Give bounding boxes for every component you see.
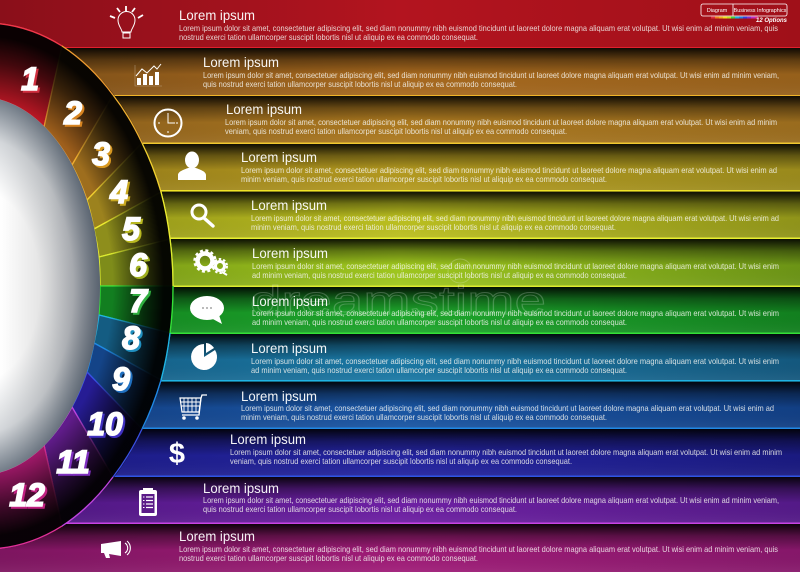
text block: row 3: veniam, quis nostrud exerci tation ullamcorper suscipit lobortis nisl ut aliquip ex ea commodo consequat. [225,126,567,136]
heading: row 8: Lorem ipsum [251,341,327,356]
segment 1 [0,23,62,127]
segment 11 [44,407,113,526]
text block: row 9: minim veniam, quis nostrud exerci tation ullamcorper suscipit lobortis nisl ut aliquip ex ea commodo consequat. [241,412,607,422]
panel: row 4 [0,144,800,192]
panel: row 6 [0,239,800,287]
heading: row 7: Lorem ipsum [252,294,328,309]
segment 7 [99,286,173,333]
text block: row 11: quis nostrud exerci tation ullamcorper suscipit lobortis nisl ut aliquip ex ea commodo consequat. [203,504,517,514]
text block: row 7 [252,308,779,327]
badge: 12 options: Diagram [707,8,728,14]
number 2: 2 [63,95,82,131]
icon: megaphone [101,541,130,558]
badge: 12 options: Business Infographics [734,8,787,14]
number 12: 12 [9,477,45,513]
panel: row 10 [0,429,800,477]
number 7: 7 [129,283,149,319]
watermark: dreamstime [250,279,546,323]
text block: row 4: minim veniam, quis nostrud exerci tation ullamcorper suscipit lobortis nisl ut aliquip ex ea commodo consequat. [241,174,607,184]
circular ring of segments [0,23,173,549]
segment 6 [99,239,173,286]
number 4: 4 [109,174,128,210]
heading: row 9: Lorem ipsum [241,389,317,404]
segment 2 [44,46,113,165]
text block: row 1: nostrud exerci tation ullamcorper suscipit lobortis nisl ut aliquip ex ea commodo consequat. [179,32,478,42]
text block: row 2 [203,70,779,89]
heading: row 11: Lorem ipsum [203,481,279,496]
heading: row 12: Lorem ipsum [179,529,255,544]
ring shadow [0,23,173,549]
number 5: 5 [122,211,141,247]
badge: 12 options [701,4,788,24]
text block: row 2: quis nostrud exerci tation ullamcorper suscipit lobortis nisl ut aliquip ex ea commodo consequat. [203,79,517,89]
panel: row 1 [0,0,800,49]
number 3: 3 [92,136,110,172]
number 10: 10 [87,406,123,442]
panel: row 9 [0,382,800,429]
icon: person [178,152,206,180]
icon: bar chart [135,64,162,86]
panel: row 7 [0,287,800,334]
text block: row 5 [251,213,779,232]
panel: row 3 [0,96,800,144]
panel: row 8 [0,334,800,382]
text block: row 5: minim veniam, quis nostrud exerci tation ullamcorper suscipit lobortis nisl ut aliquip ex ea commodo consequat. [251,222,616,232]
text block: row 11 [203,495,779,514]
number 1: 1 [21,61,39,97]
heading: row 5: Lorem ipsum [251,198,327,213]
icon: clipboard [139,488,157,516]
central white disc [0,97,100,475]
text block: row 1 [179,23,778,42]
text block: row 10 [230,447,782,466]
number 6: 6 [129,247,147,283]
number 11: 11 [56,444,90,480]
icon: clock [154,110,182,136]
text block: row 6 [252,261,779,280]
segment 10 [72,372,142,477]
panel: row 12 [0,524,800,572]
icon: pie chart [191,343,217,370]
panel: row 2 [0,48,800,97]
number 8: 8 [122,320,140,356]
icon: shopping cart [180,395,207,420]
segment 12 [0,445,62,549]
text block: row 6: ad minim veniam, quis nostrud exerci tation ullamcorper suscipit lobortis nisl ut aliquip ex ea commodo consequat. [252,270,627,280]
heading: row 1: Lorem ipsum [179,8,255,23]
watermark [250,259,546,323]
text block: row 8 [251,356,779,375]
heading: row 2: Lorem ipsum [203,55,279,70]
icon: magnifier [192,205,213,226]
segment 8 [94,315,170,380]
segment 4 [87,143,161,229]
heading: row 6: Lorem ipsum [252,246,328,261]
text block: row 3 [225,117,777,136]
segment 5 [94,192,170,257]
segment numbers [9,61,149,513]
icon: light bulb [110,6,143,38]
icon: dollar sign: $ [169,438,185,470]
heading: row 10: Lorem ipsum [230,432,306,447]
text block: row 8: ad minim veniam, quis nostrud exerci tation ullamcorper suscipit lobortis nisl ut aliquip ex ea commodo consequat. [251,365,627,375]
badge: 12 options: 12 Options [756,18,788,24]
number 9: 9 [112,361,130,397]
heading: row 3: Lorem ipsum [226,102,302,117]
heading: row 4: Lorem ipsum [241,150,317,165]
icon: gears [194,250,227,275]
panel: row 11 [0,477,800,524]
ring outer edge [0,23,173,549]
text block: row 9 [241,403,774,422]
text block: row 4 [241,165,777,184]
segment 9 [87,343,161,429]
panel: row 5 [0,192,800,239]
text block: row 7: ad minim veniam, quis nostrud exerci tation ullamcorper suscipit lobortis nisl ut aliquip ex ea commodo consequat. [252,317,627,327]
icon: speech bubble [190,296,224,324]
segment 3 [72,95,142,200]
text block: row 12 [179,544,778,563]
text block: row 10: veniam, quis nostrud exerci tation ullamcorper suscipit lobortis nisl ut aliquip ex ea commodo consequat. [230,456,572,466]
text block: row 12: nostrud exerci tation ullamcorper suscipit lobortis nisl ut aliquip ex ea commodo consequat. [179,553,478,563]
